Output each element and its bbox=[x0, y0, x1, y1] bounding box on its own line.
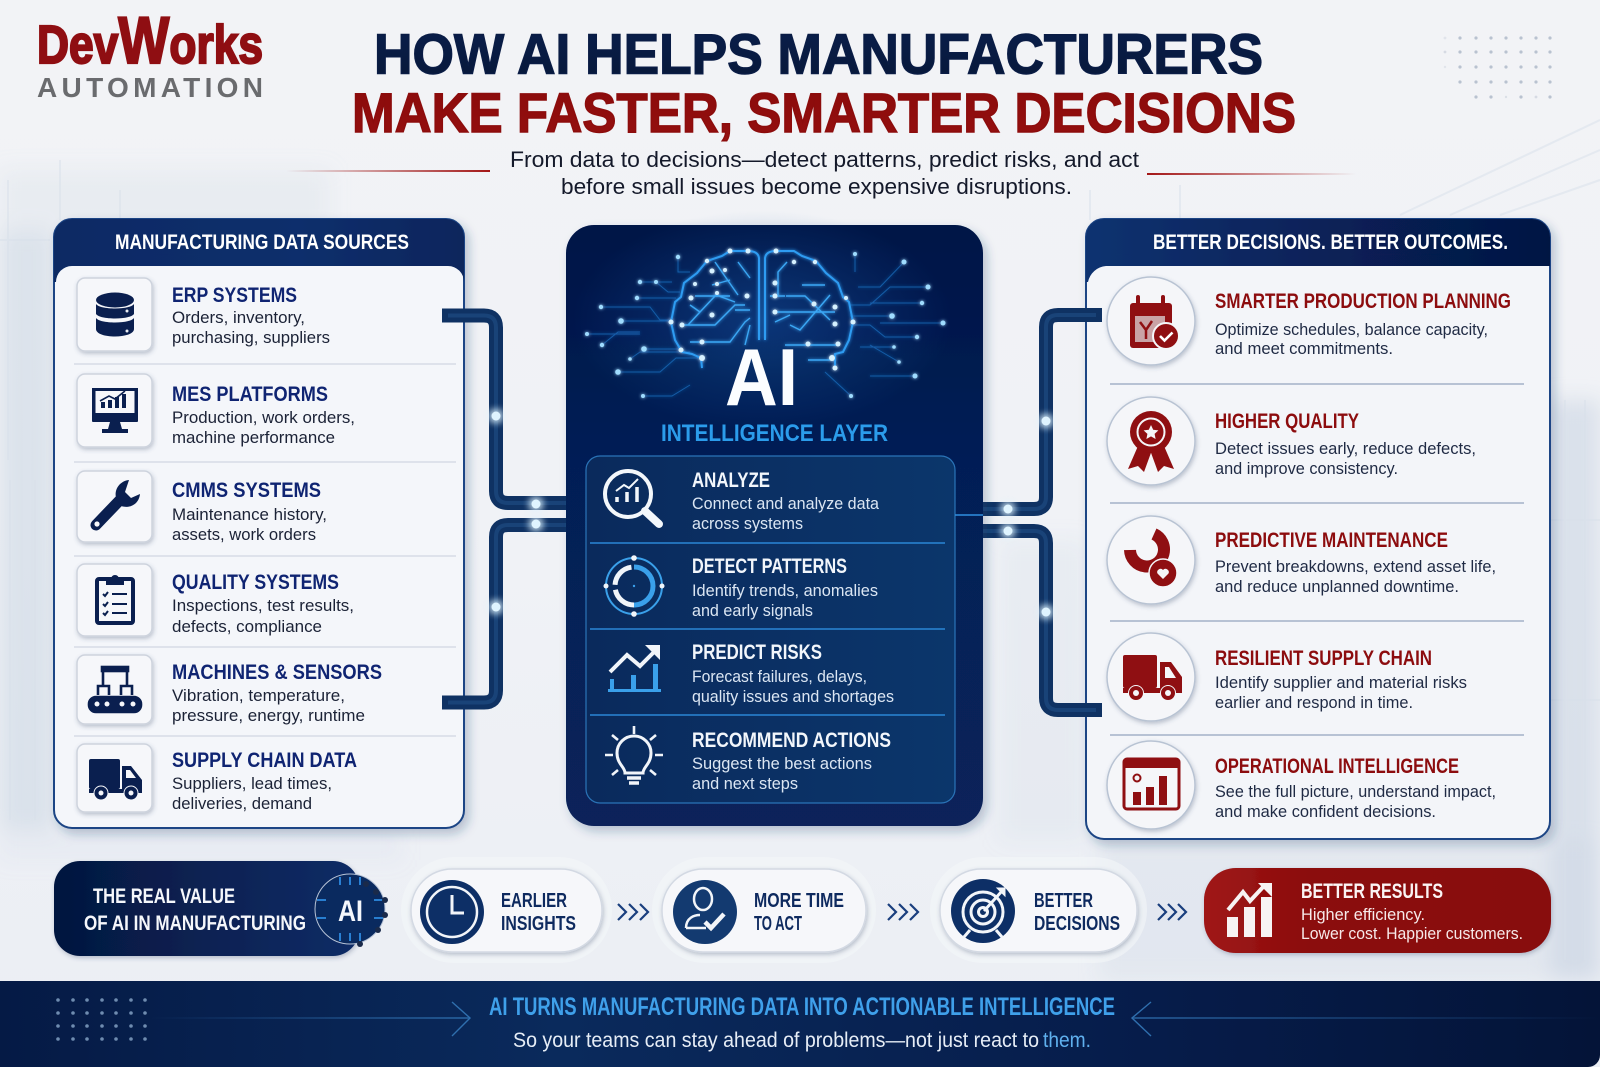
step: detect patterns bbox=[604, 555, 878, 620]
panel frame and header bbox=[54, 219, 464, 828]
row: operational intelligence bbox=[1107, 741, 1496, 829]
predict description bbox=[692, 668, 894, 706]
panel: better decisions better outcomes bbox=[1086, 219, 1550, 839]
brain right hemisphere bbox=[765, 248, 856, 370]
icon: rising chart bbox=[608, 645, 661, 692]
intelligence description: See the full picture, understand impact, bbox=[1215, 783, 1496, 801]
panel: AI intelligence layer bbox=[566, 210, 983, 826]
quality description: Detect issues early, reduce defects, bbox=[1215, 440, 1476, 458]
row: CMMS systems bbox=[77, 471, 327, 544]
decorative dots bbox=[56, 998, 147, 1041]
quality title: QUALITY SYSTEMS bbox=[172, 571, 339, 594]
icon: truck bbox=[89, 759, 142, 800]
arrow chevrons bbox=[618, 904, 648, 920]
quality description bbox=[1215, 440, 1476, 478]
row: higher quality bbox=[1107, 397, 1476, 485]
supply chain description bbox=[172, 775, 332, 813]
footer banner bbox=[0, 981, 1600, 1067]
MES title: MES PLATFORMS bbox=[172, 383, 328, 406]
connectors: right outcome pipes bbox=[980, 315, 1102, 710]
recommend title: RECOMMEND ACTIONS bbox=[692, 729, 891, 752]
recommend description: Suggest the best actions bbox=[692, 755, 872, 773]
better results description: Higher efficiency. bbox=[1301, 906, 1425, 924]
recommend description: and next steps bbox=[692, 775, 798, 793]
callout: the real value of AI: OF AI IN MANUFACTURING bbox=[84, 912, 306, 935]
icon: magnifier chart bbox=[605, 471, 659, 524]
ERP description: purchasing, suppliers bbox=[172, 329, 330, 347]
subtitle: before small issues become expensive disruptions. bbox=[561, 174, 1072, 199]
ERP description: Orders, inventory, bbox=[172, 309, 305, 327]
analyze title: ANALYZE bbox=[692, 469, 770, 492]
logo subtitle AUTOMATION: AUTOMATION bbox=[37, 72, 263, 103]
value strip bbox=[54, 857, 1551, 963]
planning title: SMARTER PRODUCTION PLANNING bbox=[1215, 290, 1511, 313]
more time label: MORE TIME bbox=[754, 890, 844, 912]
quality description: defects, compliance bbox=[172, 618, 322, 636]
title line 1: HOW AI HELPS MANUFACTURERS bbox=[374, 22, 1263, 86]
better results description bbox=[1301, 906, 1523, 943]
step: predict risks bbox=[608, 641, 894, 706]
icon: wrench and heart bbox=[1130, 534, 1177, 587]
quality title: HIGHER QUALITY bbox=[1215, 410, 1359, 433]
row: resilient supply chain bbox=[1107, 633, 1467, 721]
supply chain description: Suppliers, lead times, bbox=[172, 775, 332, 793]
predict title: PREDICT RISKS bbox=[692, 641, 822, 664]
supply chain title: RESILIENT SUPPLY CHAIN bbox=[1215, 647, 1432, 670]
big AI label: AI bbox=[725, 333, 798, 423]
decorative dots top right bbox=[1444, 36, 1552, 99]
planning description: and meet commitments. bbox=[1215, 340, 1393, 358]
icon: clipboard bbox=[97, 575, 133, 623]
step: more time to act bbox=[652, 857, 876, 963]
detect description bbox=[692, 582, 878, 620]
logo bbox=[37, 3, 263, 103]
brain external traces bbox=[587, 254, 943, 396]
analyze description: across systems bbox=[692, 515, 803, 533]
right arrow bbox=[1132, 1002, 1600, 1036]
step: better results bbox=[1204, 868, 1551, 953]
center panel background bbox=[566, 225, 983, 826]
more time label: TO ACT bbox=[754, 913, 802, 935]
icon: award ribbon bbox=[1128, 411, 1174, 472]
MES description bbox=[172, 409, 355, 447]
predict description: quality issues and shortages bbox=[692, 688, 894, 706]
icon: person check bbox=[673, 880, 737, 944]
maintenance description bbox=[1215, 558, 1496, 596]
better decisions label: DECISIONS bbox=[1034, 913, 1120, 935]
connectors: left data pipes bbox=[442, 316, 570, 702]
supply chain description bbox=[1215, 674, 1467, 712]
maintenance description: and reduce unplanned downtime. bbox=[1215, 578, 1459, 596]
footer sentence: them. bbox=[1043, 1029, 1091, 1052]
machines description: pressure, energy, runtime bbox=[172, 707, 365, 725]
machines description bbox=[172, 687, 365, 725]
row: machines and sensors bbox=[77, 655, 382, 725]
panel frame and header bbox=[1086, 219, 1550, 839]
row: predictive maintenance bbox=[1107, 516, 1496, 604]
logo wordmark DevWorks: DevWorks bbox=[37, 3, 263, 77]
planning description: Optimize schedules, balance capacity, bbox=[1215, 321, 1488, 339]
icon: conveyor machine bbox=[89, 667, 141, 712]
icon: AI chip bbox=[315, 874, 388, 947]
brain left hemisphere bbox=[668, 248, 759, 368]
machines description: Vibration, temperature, bbox=[172, 687, 345, 705]
title line 2: MAKE FASTER, SMARTER DECISIONS bbox=[352, 81, 1296, 144]
icon: light bulb bbox=[605, 726, 663, 783]
quality description bbox=[172, 597, 354, 636]
panel heading: MANUFACTURING DATA SOURCES bbox=[115, 231, 409, 254]
icon: target arrow bbox=[951, 879, 1015, 943]
inner capabilities box bbox=[586, 456, 983, 803]
icon: database bbox=[96, 292, 134, 336]
detect description: and early signals bbox=[692, 602, 813, 620]
step: earlier insights bbox=[401, 857, 612, 963]
icon: monitor bbox=[92, 388, 138, 433]
callout: the real value of AI: THE REAL VALUE bbox=[93, 885, 235, 908]
analyze description bbox=[692, 495, 880, 533]
icon: dashboard chart bbox=[1124, 759, 1179, 809]
subtitle bbox=[286, 147, 1356, 199]
ERP description bbox=[172, 309, 330, 347]
icon: calendar check bbox=[1130, 295, 1179, 349]
row: MES platforms bbox=[77, 374, 355, 447]
panel: manufacturing data sources bbox=[54, 219, 464, 828]
left arrow bbox=[150, 1002, 470, 1036]
icon: circuit brain bbox=[585, 248, 946, 398]
better results description: Lower cost. Happier customers. bbox=[1301, 925, 1523, 943]
more time label bbox=[754, 890, 844, 935]
analyze description: Connect and analyze data bbox=[692, 495, 880, 513]
icon: AI chip: AI bbox=[338, 895, 363, 928]
ERP title: ERP SYSTEMS bbox=[172, 284, 297, 307]
icon: target pattern bbox=[604, 555, 664, 617]
intelligence description bbox=[1215, 783, 1496, 821]
better decisions label bbox=[1034, 890, 1120, 935]
supply chain description: earlier and respond in time. bbox=[1215, 694, 1413, 712]
machines title: MACHINES & SENSORS bbox=[172, 661, 382, 684]
step: analyze bbox=[605, 469, 880, 533]
CMMS description: assets, work orders bbox=[172, 526, 316, 544]
footer sentence: So your teams can stay ahead of problems—not just react to bbox=[513, 1029, 1039, 1052]
icon: growth bars bbox=[1227, 883, 1272, 937]
CMMS title: CMMS SYSTEMS bbox=[172, 479, 321, 502]
supply chain description: Identify supplier and material risks bbox=[1215, 674, 1467, 692]
detect description: Identify trends, anomalies bbox=[692, 582, 878, 600]
better results title: BETTER RESULTS bbox=[1301, 880, 1443, 903]
row: supply chain data bbox=[77, 744, 357, 813]
MES description: Production, work orders, bbox=[172, 409, 355, 427]
callout: the real value of AI bbox=[54, 861, 388, 956]
CMMS description: Maintenance history, bbox=[172, 506, 327, 524]
quality description: Inspections, test results, bbox=[172, 597, 354, 615]
maintenance title: PREDICTIVE MAINTENANCE bbox=[1215, 529, 1448, 552]
detect title: DETECT PATTERNS bbox=[692, 555, 847, 578]
icon: truck bbox=[1123, 655, 1182, 700]
row: smarter production planning bbox=[1107, 277, 1511, 365]
intelligence title: OPERATIONAL INTELLIGENCE bbox=[1215, 755, 1459, 778]
maintenance description: Prevent breakdowns, extend asset life, bbox=[1215, 558, 1496, 576]
icon: clock bbox=[420, 880, 484, 944]
footer headline: AI TURNS MANUFACTURING DATA INTO ACTIONABLE INTELLIGENCE bbox=[489, 993, 1115, 1021]
panel heading: BETTER DECISIONS. BETTER OUTCOMES. bbox=[1153, 231, 1508, 254]
better decisions label: BETTER bbox=[1034, 890, 1093, 912]
intelligence description: and make confident decisions. bbox=[1215, 803, 1436, 821]
arrow chevrons bbox=[1158, 904, 1186, 920]
MES description: machine performance bbox=[172, 429, 335, 447]
recommend description bbox=[692, 755, 872, 793]
supply chain description: deliveries, demand bbox=[172, 795, 312, 813]
arrow chevrons bbox=[888, 904, 918, 920]
earlier insights label: INSIGHTS bbox=[501, 913, 576, 935]
icon: wrench bbox=[94, 480, 140, 527]
earlier insights label bbox=[501, 890, 576, 935]
supply chain title: SUPPLY CHAIN DATA bbox=[172, 749, 357, 772]
subtitle: From data to decisions—detect patterns, predict risks, and act bbox=[510, 147, 1139, 172]
step: better decisions bbox=[930, 857, 1147, 963]
intelligence layer heading: INTELLIGENCE LAYER bbox=[661, 420, 888, 447]
predict description: Forecast failures, delays, bbox=[692, 668, 867, 686]
row: ERP systems bbox=[77, 278, 330, 351]
CMMS description bbox=[172, 506, 327, 544]
earlier insights label: EARLIER bbox=[501, 890, 567, 912]
step: recommend actions bbox=[605, 726, 891, 793]
planning description bbox=[1215, 321, 1488, 358]
row: quality systems bbox=[77, 564, 354, 636]
quality description: and improve consistency. bbox=[1215, 460, 1398, 478]
title bbox=[352, 22, 1296, 144]
